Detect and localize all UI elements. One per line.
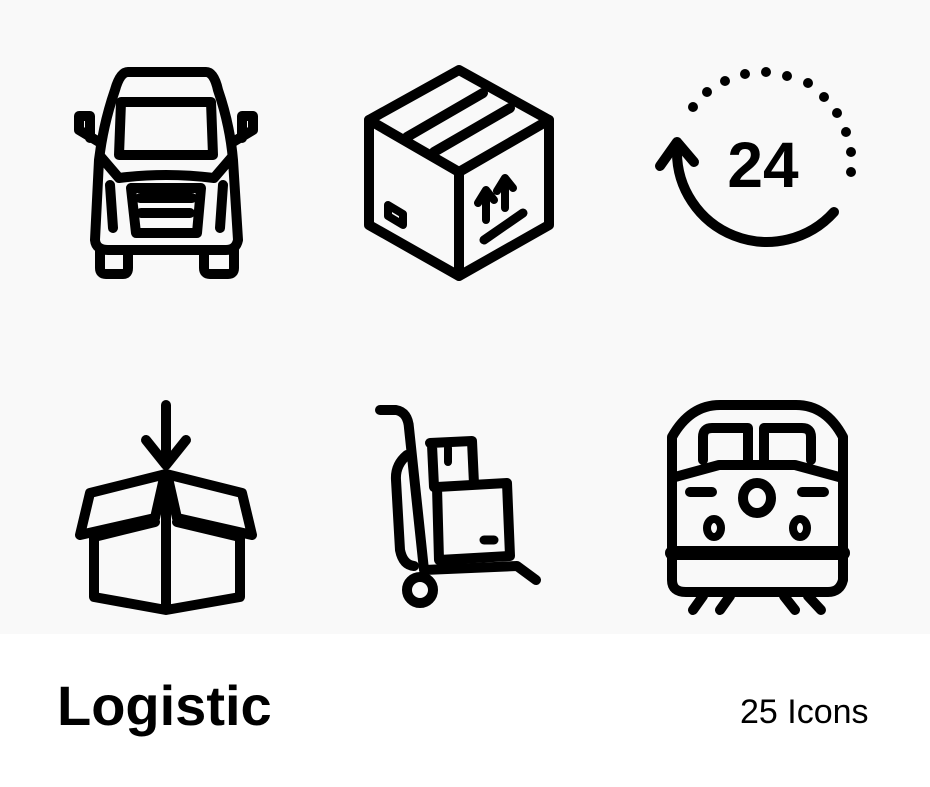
icon: train xyxy=(672,405,843,610)
icon: 24 hours: 24 xyxy=(727,129,799,201)
icon: open box with arrow xyxy=(80,405,252,610)
icon: shipping box xyxy=(369,70,549,276)
title: Logistic xyxy=(57,674,272,737)
icon: truck xyxy=(79,72,253,274)
icon: 24 hours xyxy=(660,67,856,242)
icon count label: 25 Icons xyxy=(740,693,869,731)
icon: hand truck xyxy=(380,410,536,603)
